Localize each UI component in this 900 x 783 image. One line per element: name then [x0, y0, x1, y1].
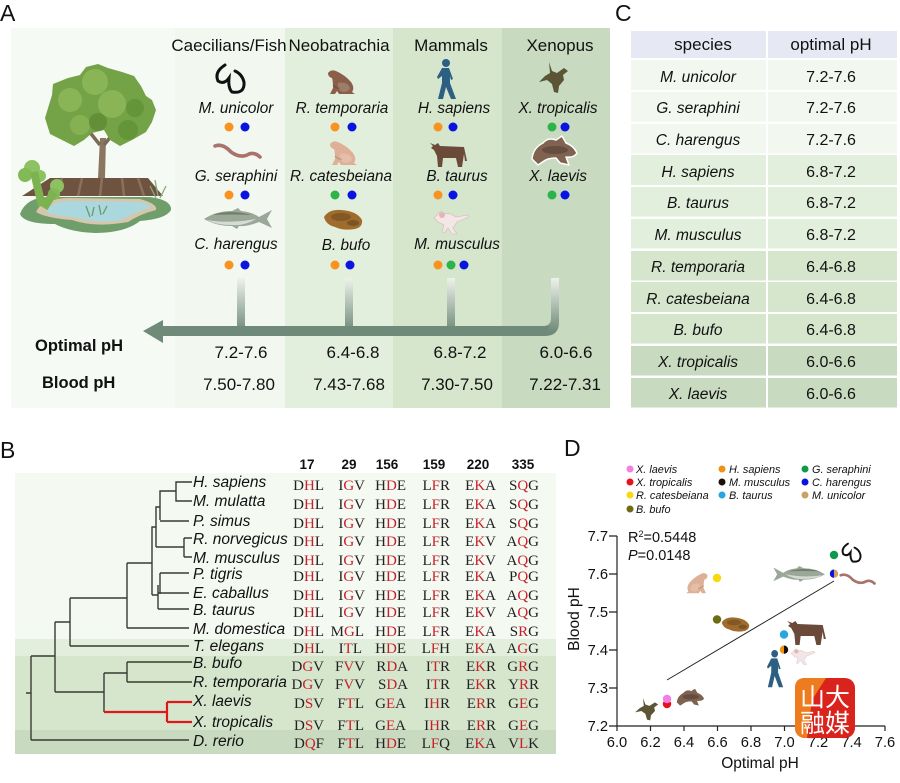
row: R. temporaria [631, 251, 897, 280]
legend: X. tropicalis [635, 477, 693, 489]
table header [631, 31, 897, 58]
residue alignment: DSV [294, 696, 324, 712]
x axis tick labels: 7.4 [841, 735, 862, 751]
residue alignment: EKA [465, 624, 496, 640]
residue alignment: HDE [375, 497, 406, 513]
regression line [667, 581, 834, 680]
dots: R. temporaria [330, 122, 356, 132]
residue alignment: HDE [375, 516, 406, 532]
species labels: M. musculus [193, 550, 280, 567]
illustration: tree and pond [18, 64, 171, 233]
residue position headers [299, 457, 535, 472]
row: X. tropicalis [631, 346, 897, 376]
residue position headers: 29 [341, 457, 357, 472]
residue alignment: HDE [375, 534, 406, 550]
axes [609, 536, 885, 731]
heading: Mammals: Mammals [414, 36, 488, 55]
label: R. catesbeiana: R. catesbeiana [290, 168, 392, 185]
y axis title: Blood pH [566, 587, 583, 651]
panel A background [11, 28, 175, 408]
residue alignment: SQG [509, 497, 539, 513]
residue alignment: EKA [465, 569, 496, 585]
statistics annotation: P=0.0148 [628, 548, 690, 564]
label: Blood pH: Blood pH [42, 374, 115, 392]
x axis tick labels: 7.0 [774, 735, 795, 751]
residue alignment [291, 478, 539, 752]
values: blood pH: 7.30-7.50 [421, 375, 493, 394]
dots: X. tropicalis [548, 122, 570, 132]
legend: C. harengus [812, 477, 872, 489]
icon: X. tropicalis [539, 62, 568, 93]
residue alignment: FTL [337, 736, 364, 752]
phylogenetic tree [26, 482, 192, 740]
species labels: T. elegans [193, 638, 264, 655]
residue alignment: HDE [375, 553, 406, 569]
residue alignment: GEG [508, 718, 539, 734]
residue alignment: GEA [375, 696, 406, 712]
row: B. bufo: B. bufo [673, 322, 723, 339]
residue alignment: LFQ [422, 736, 450, 752]
chart species icons [635, 544, 874, 720]
residue alignment: DGV [291, 659, 324, 675]
residue alignment: DHL [293, 588, 324, 604]
icon: B. taurus [430, 143, 467, 167]
values: optimal pH: 7.2-7.6 [215, 343, 267, 362]
y axis tick labels: 7.7 [588, 529, 608, 545]
row: H. sapiens: H. sapiens [661, 164, 735, 181]
panel: A habitat and pH overview [0, 0, 610, 408]
icon: B. bufo [324, 210, 362, 230]
residue alignment: PQG [509, 569, 539, 585]
residue alignment: AGG [506, 641, 539, 657]
row: M. musculus: M. musculus [654, 227, 742, 244]
residue alignment: DQF [294, 736, 324, 752]
row: G. seraphini: G. seraphini [656, 100, 740, 117]
residue alignment: IGV [338, 478, 365, 494]
residue alignment: LFR [422, 569, 450, 585]
residue alignment: EKR [466, 677, 496, 693]
legend: G. seraphini [812, 464, 871, 476]
residue alignment: EKA [465, 516, 496, 532]
residue alignment: EKV [465, 553, 496, 569]
residue position headers: 17 [299, 457, 315, 472]
dots: H. sapiens [434, 122, 458, 132]
label: Optimal pH: Optimal pH [35, 337, 123, 355]
statistics annotation: R [628, 530, 638, 546]
residue alignment: DHL [293, 534, 324, 550]
arrow: pH trend [143, 278, 559, 343]
label: M. unicolor: M. unicolor [199, 100, 274, 117]
residue alignment: HDE [375, 569, 406, 585]
residue alignment: DHL [293, 624, 324, 640]
row: X. tropicalis: X. tropicalis [657, 354, 738, 371]
residue alignment: ERR [467, 718, 496, 734]
residue alignment: EKA [465, 497, 496, 513]
species labels: M. mulatta [193, 493, 266, 510]
residue alignment: LFR [422, 497, 450, 513]
y axis tick labels [588, 529, 608, 735]
species labels: P. simus [193, 513, 251, 530]
residue alignment: MGL [331, 624, 364, 640]
legend: M. musculus [729, 477, 791, 489]
residue alignment: LFR [422, 534, 450, 550]
residue alignment: AQG [506, 553, 539, 569]
legend: R. catesbeiana [636, 490, 709, 502]
dots: C. harengus [224, 260, 250, 270]
species labels: P. tigris [193, 566, 243, 583]
panel letter C: C [615, 0, 632, 26]
dots: M. musculus [434, 260, 468, 270]
panel letter B: B [0, 437, 15, 463]
residue alignment: IGV [338, 588, 365, 604]
row: X. tropicalis: 6.0-6.6 [806, 354, 856, 371]
legend: B. taurus [729, 490, 773, 502]
residue alignment: LFR [422, 624, 450, 640]
residue alignment: ITL [339, 641, 362, 657]
dots: R. catesbeiana [330, 190, 356, 200]
residue alignment: EKA [465, 736, 496, 752]
residue alignment: IGV [338, 605, 365, 621]
y axis tick labels: 7.5 [588, 605, 608, 621]
x axis tick labels: 6.0 [607, 735, 627, 751]
row: H. sapiens: 6.8-7.2 [806, 164, 856, 181]
residue alignment: IGV [338, 534, 365, 550]
panel: B phylogeny and residues [0, 437, 556, 754]
row: B. taurus [631, 187, 897, 216]
row: M. unicolor [631, 60, 897, 90]
row: B. taurus: 6.8-7.2 [806, 195, 856, 212]
icon: R. catesbeiana [330, 141, 357, 165]
dots: B. taurus [434, 190, 458, 200]
residue alignment: VLK [508, 736, 539, 752]
panel: D scatter plot [564, 435, 895, 772]
dots: M. unicolor [224, 122, 250, 132]
residue alignment: SQG [509, 516, 539, 532]
residue alignment: LFR [422, 478, 450, 494]
residue alignment: EKA [465, 478, 496, 494]
statistics annotation [628, 529, 696, 564]
residue alignment: IGV [338, 553, 365, 569]
y axis tick labels: 7.6 [588, 567, 608, 583]
residue alignment: DHL [293, 516, 324, 532]
row: C. harengus: 7.2-7.6 [806, 132, 856, 149]
residue alignment: HDE [375, 641, 406, 657]
residue alignment: AQG [506, 534, 539, 550]
residue alignment: GEA [375, 718, 406, 734]
row: H. sapiens [631, 155, 897, 185]
x axis title: Optimal pH [721, 755, 799, 772]
background bands [15, 473, 556, 754]
residue alignment: EKR [466, 659, 496, 675]
residue alignment: SRG [510, 624, 539, 640]
x axis tick labels: 6.6 [707, 735, 728, 751]
row: R. catesbeiana [631, 282, 897, 312]
residue alignment: FVV [335, 659, 365, 675]
residue alignment: DHL [293, 497, 324, 513]
data points [663, 551, 838, 708]
residue alignment: DSV [294, 718, 324, 734]
label: R. temporaria: R. temporaria [296, 100, 388, 117]
band: Neobatrachia [285, 28, 393, 408]
statistics annotation: 2 [638, 529, 644, 539]
dots: B. bufo [330, 260, 354, 270]
row: B. taurus: B. taurus [667, 195, 729, 212]
residue alignment: LFR [422, 605, 450, 621]
residue alignment: HDE [375, 588, 406, 604]
residue alignment: FTL [337, 718, 364, 734]
row: R. catesbeiana: R. catesbeiana [646, 291, 750, 308]
residue alignment: DHL [293, 553, 324, 569]
residue alignment: EKV [465, 605, 496, 621]
label: X. tropicalis: X. tropicalis [517, 100, 598, 117]
species labels: D. rerio [193, 733, 244, 750]
residue alignment: DHL [293, 478, 324, 494]
row: C. harengus [631, 124, 897, 154]
x axis tick labels [607, 735, 895, 751]
table header: optimal pH [790, 35, 872, 54]
row: X. laevis: X. laevis [668, 386, 728, 403]
residue alignment: DHL [293, 605, 324, 621]
residue alignment: HDE [375, 605, 406, 621]
row: B. bufo [631, 314, 897, 344]
values: blood pH: 7.22-7.31 [529, 375, 601, 394]
band: Caecilians/Fish [175, 28, 285, 408]
label: X. laevis: X. laevis [528, 168, 587, 185]
row: M. unicolor: 7.2-7.6 [806, 69, 856, 86]
residue alignment: FTL [337, 696, 364, 712]
residue alignment: DHL [293, 569, 324, 585]
panel letter D: D [564, 435, 581, 461]
y axis tick labels: 7.3 [588, 681, 608, 697]
residue alignment: HDE [375, 478, 406, 494]
residue alignment: YRR [508, 677, 539, 693]
row: X. laevis [631, 378, 897, 408]
residue alignment: SQG [509, 478, 539, 494]
residue alignment: IHR [424, 696, 450, 712]
row: C. harengus: C. harengus [656, 132, 740, 149]
species labels: M. domestica [193, 621, 286, 638]
y axis tick labels: 7.2 [588, 719, 608, 735]
residue alignment: AQG [506, 605, 539, 621]
row: X. laevis: 6.0-6.6 [806, 386, 856, 403]
residue alignment: FVV [335, 677, 365, 693]
species labels: B. bufo [193, 655, 242, 672]
residue alignment: IGV [338, 497, 365, 513]
dots: X. laevis [548, 190, 570, 200]
residue position headers: 220 [467, 457, 489, 472]
watermark logo: 山大 [800, 684, 850, 712]
heading: Neobatrachia: Neobatrachia [288, 36, 390, 55]
row: R. temporaria: R. temporaria [651, 259, 745, 276]
residue alignment: GEG [508, 696, 539, 712]
residue alignment: IGV [338, 516, 365, 532]
values: blood pH: 7.43-7.68 [313, 375, 385, 394]
legend: H. sapiens [729, 464, 781, 476]
statistics annotation: =0.5448 [644, 530, 696, 546]
residue alignment: RDA [376, 659, 408, 675]
row: M. musculus [631, 219, 897, 248]
row: G. seraphini [631, 92, 897, 122]
species labels: H. sapiens [193, 474, 266, 491]
row: R. temporaria: 6.4-6.8 [806, 259, 856, 276]
band: Mammals [393, 28, 502, 408]
species labels: X. tropicalis [192, 714, 273, 731]
residue alignment: LFR [422, 588, 450, 604]
panel: C species table [615, 0, 897, 408]
values: optimal pH [215, 343, 592, 362]
species labels: X. laevis [192, 693, 252, 710]
label: C. harengus: C. harengus [194, 236, 278, 253]
band: Xenopus [502, 28, 610, 408]
residue alignment: LFR [422, 553, 450, 569]
residue position headers: 156 [376, 457, 399, 472]
values: optimal pH: 6.4-6.8 [327, 343, 379, 362]
residue alignment: IGV [338, 569, 365, 585]
x axis tick labels: 7.6 [875, 735, 895, 751]
residue alignment: ITR [426, 677, 450, 693]
y axis tick labels: 7.4 [588, 643, 608, 659]
legend: M. unicolor [812, 490, 866, 502]
residue alignment: LFH [422, 641, 450, 657]
residue alignment: DHL [293, 641, 324, 657]
species labels: R. temporaria [193, 674, 287, 691]
row: B. bufo: 6.4-6.8 [806, 322, 856, 339]
icon: G. seraphini [215, 145, 260, 157]
panel letter A: A [0, 0, 16, 26]
values: blood pH [203, 375, 601, 394]
x axis tick labels: 6.2 [640, 735, 661, 751]
label: G. seraphini: G. seraphini [195, 168, 278, 185]
table header: species [674, 35, 732, 54]
species labels: E. caballus [193, 585, 269, 602]
residue alignment: EKA [465, 641, 496, 657]
icon: M. musculus [434, 211, 469, 234]
watermark logo: 融媒 [800, 710, 850, 738]
x axis tick labels: 6.8 [741, 735, 761, 751]
legend: X. laevis [635, 464, 678, 476]
residue alignment: ITR [426, 659, 450, 675]
label: M. musculus: M. musculus [414, 236, 500, 253]
residue alignment: EKA [465, 588, 496, 604]
label: B. taurus: B. taurus [426, 168, 488, 185]
heading: Caecilians/Fish: Caecilians/Fish [171, 36, 287, 55]
label: B. bufo: B. bufo [322, 237, 371, 254]
values: optimal pH: 6.0-6.6 [540, 343, 592, 362]
legend: B. bufo [636, 504, 671, 516]
residue alignment: IHR [424, 718, 450, 734]
residue position headers: 159 [423, 457, 445, 472]
icon: R. temporaria [328, 70, 355, 94]
dots: G. seraphini [224, 190, 250, 200]
row: R. catesbeiana: 6.4-6.8 [806, 291, 856, 308]
label: H. sapiens: H. sapiens [418, 100, 490, 117]
residue alignment: HDE [375, 624, 406, 640]
residue alignment: HDE [375, 736, 406, 752]
icon: M. unicolor [217, 65, 244, 92]
watermark logo [795, 678, 855, 738]
species labels: R. norvegicus [193, 531, 288, 548]
residue alignment: GRG [507, 659, 539, 675]
residue alignment: DGV [291, 677, 324, 693]
residue alignment: EKV [465, 534, 496, 550]
values: blood pH: 7.50-7.80 [203, 375, 275, 394]
x axis tick labels: 6.4 [674, 735, 694, 751]
residue alignment: SDA [378, 677, 408, 693]
residue position headers: 335 [512, 457, 535, 472]
residue alignment: LFR [422, 516, 450, 532]
species labels [192, 474, 288, 750]
values: optimal pH: 6.8-7.2 [434, 343, 486, 362]
heading: Xenopus: Xenopus [526, 36, 594, 55]
species labels: B. taurus [193, 602, 255, 619]
icon: C. harengus [204, 208, 272, 229]
residue alignment: ERR [467, 696, 496, 712]
row: G. seraphini: 7.2-7.6 [806, 100, 856, 117]
icon: H. sapiens [437, 59, 456, 99]
residue alignment: AQG [506, 588, 539, 604]
legend [626, 464, 872, 516]
x axis tick labels: 7.2 [808, 735, 828, 751]
icon: X. laevis [532, 136, 577, 165]
row: M. musculus: 6.8-7.2 [806, 227, 856, 244]
row: M. unicolor: M. unicolor [660, 69, 737, 86]
